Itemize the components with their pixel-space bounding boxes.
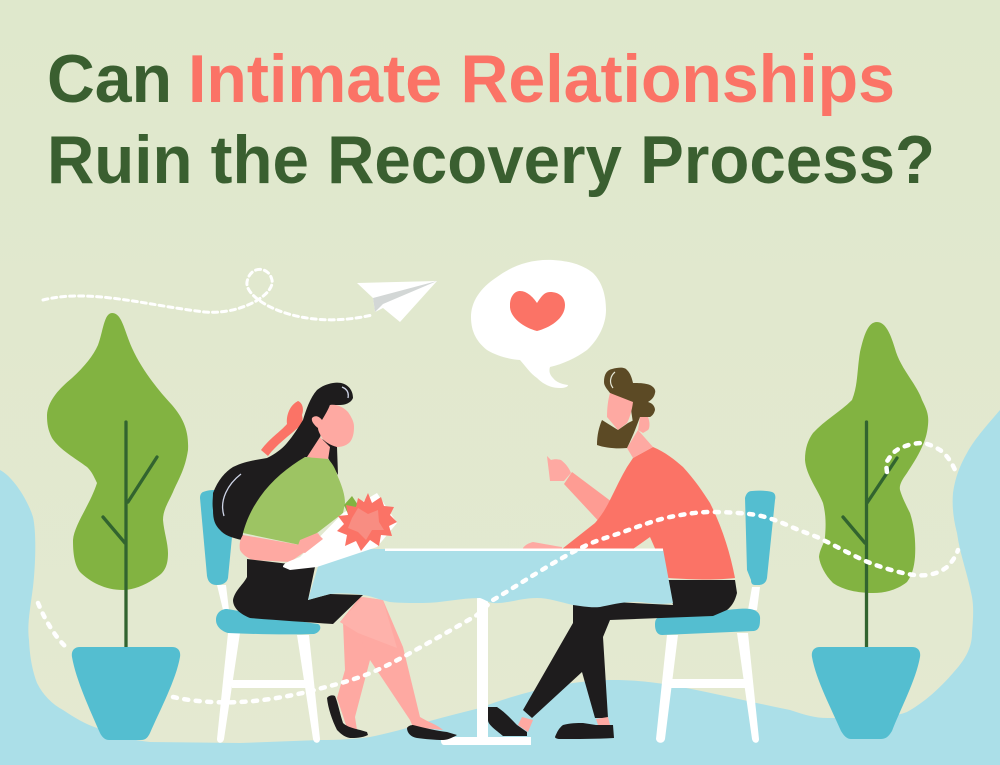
front leg xyxy=(340,597,443,730)
ribbon xyxy=(261,401,303,456)
beard xyxy=(597,417,640,448)
hair highlights xyxy=(223,387,348,516)
background: blue waves xyxy=(0,410,1000,765)
shoes xyxy=(488,707,527,736)
woman xyxy=(213,383,457,740)
woman's chair xyxy=(200,490,320,743)
leaf xyxy=(805,322,928,593)
shoes xyxy=(327,695,368,738)
arm xyxy=(240,533,322,562)
hand xyxy=(547,456,571,481)
table leg and base xyxy=(441,598,531,745)
man xyxy=(488,368,737,739)
back leg xyxy=(337,622,400,730)
man's chair xyxy=(655,491,775,743)
neck xyxy=(627,430,653,458)
title: Can xyxy=(47,41,172,117)
neck xyxy=(307,437,330,460)
title: Intimate Relationships xyxy=(188,41,895,117)
near hand xyxy=(523,542,562,550)
face xyxy=(607,393,633,430)
torso: green top xyxy=(243,457,345,545)
ear xyxy=(638,417,650,433)
torso: coral sweater xyxy=(562,447,735,580)
leaf xyxy=(47,313,188,590)
icon: paper plane xyxy=(357,281,437,322)
tablecloth xyxy=(308,548,673,607)
hair xyxy=(213,383,353,540)
face xyxy=(312,405,354,447)
hair xyxy=(604,368,655,423)
thigh highlight xyxy=(340,597,397,648)
title: Ruin the Recovery Process? xyxy=(47,122,935,198)
title xyxy=(47,41,935,198)
speech bubble with heart xyxy=(471,260,606,388)
flowers xyxy=(337,493,397,551)
forearm xyxy=(564,472,616,527)
skirt xyxy=(233,559,363,624)
stem xyxy=(103,422,157,648)
left plant xyxy=(47,313,188,740)
legs xyxy=(523,580,737,718)
icon: heart xyxy=(510,291,565,331)
stem xyxy=(843,422,897,648)
dashed path across scene xyxy=(38,443,958,702)
hair highlight xyxy=(611,372,615,388)
bouquet xyxy=(283,493,397,570)
ankles xyxy=(518,717,610,732)
pot xyxy=(72,647,180,740)
right plant xyxy=(805,322,928,739)
pot xyxy=(812,647,920,739)
woman's hand on bouquet xyxy=(296,533,323,553)
dashed flight path of paper plane xyxy=(43,269,372,320)
